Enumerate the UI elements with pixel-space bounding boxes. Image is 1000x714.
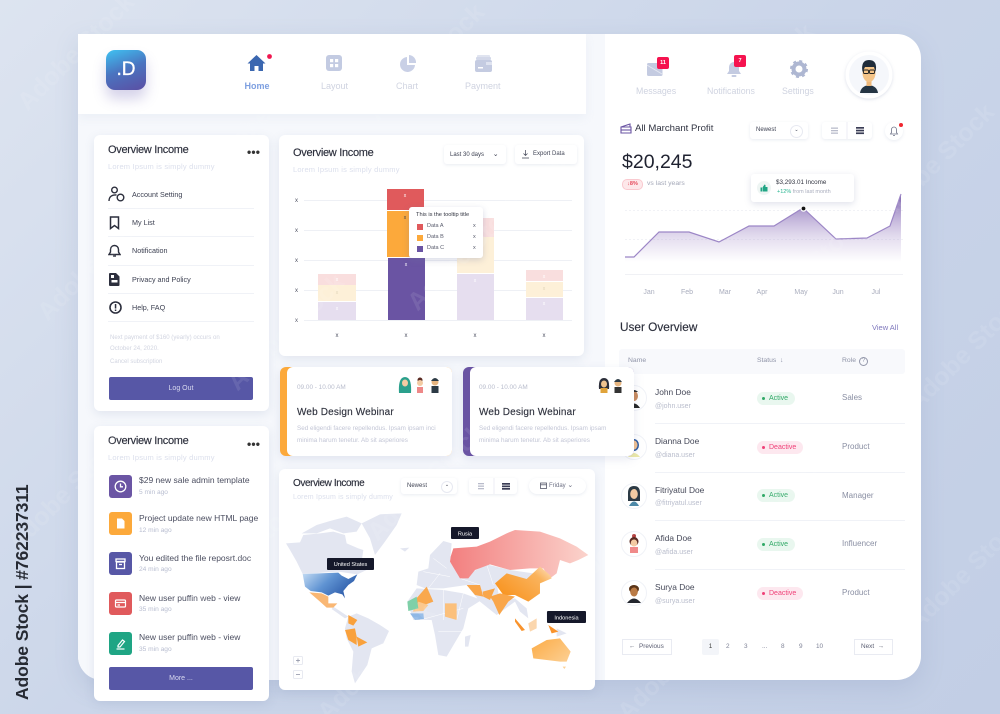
status: Dianna bbox=[757, 441, 803, 454]
panel: account menu bbox=[94, 135, 269, 411]
feed icon: file bbox=[109, 512, 132, 535]
stacked bar chart: x bbox=[543, 286, 546, 292]
watermark overlay: Adobe Stock bbox=[732, 418, 860, 546]
feed text 5: New user puffin web - view bbox=[139, 632, 240, 642]
nav: layout: Layout bbox=[321, 81, 348, 91]
pagination: previous bbox=[622, 639, 672, 655]
app logo bbox=[106, 50, 146, 90]
icon: thumbs up bbox=[757, 181, 771, 195]
description bbox=[297, 425, 436, 444]
country: Sudan bbox=[445, 603, 457, 620]
feed icon: archive bbox=[109, 552, 132, 575]
nav: chart bbox=[396, 55, 418, 91]
status: Afida bbox=[757, 538, 795, 551]
label: Indonesia bbox=[547, 611, 586, 623]
pagination: page numbers: 3 bbox=[744, 643, 748, 650]
time: 09.00 - 10.00 AM bbox=[297, 384, 346, 391]
dropdown: newest: ⌄ bbox=[794, 127, 799, 133]
area line chart: Jan bbox=[643, 289, 655, 296]
stacked bar chart: x bbox=[295, 288, 298, 294]
button: export data: Export Data bbox=[533, 151, 565, 157]
label: Indonesia: Indonesia bbox=[554, 616, 580, 622]
subtitle: bar chart: Lorem Ipsum is simply dummy bbox=[293, 165, 400, 174]
avatar: Surya bbox=[621, 580, 647, 606]
nav: home: Home bbox=[244, 81, 270, 91]
tooltip row: data A bbox=[417, 223, 476, 230]
menu: help: Help, FAQ bbox=[132, 303, 165, 312]
pagination: previous: ← Previous bbox=[629, 643, 664, 650]
nav: payment bbox=[465, 55, 501, 91]
feed text 4: New user puffin web - view bbox=[139, 593, 240, 603]
log out button bbox=[109, 377, 253, 400]
pagination: current page: 1 bbox=[709, 643, 712, 650]
income tooltip bbox=[751, 174, 854, 202]
role: Fitriyatul: Manager bbox=[842, 491, 874, 500]
stacked bar chart: x bbox=[336, 306, 339, 312]
nav: layout bbox=[321, 55, 348, 91]
stacked bar chart: x bbox=[474, 278, 477, 284]
role: Surya: Product bbox=[842, 588, 870, 597]
description: Sed eligendi facere repellendus. Ipsam ipsam inci bbox=[297, 425, 436, 432]
top icon notifications: 7 bbox=[738, 58, 742, 64]
pagination: page numbers: 2 bbox=[726, 643, 730, 650]
panel: world map bbox=[279, 469, 595, 690]
tooltip row: data B: Data B bbox=[427, 234, 444, 240]
stacked bar chart: x bbox=[404, 215, 407, 221]
watermark overlay: Adobe Stock bbox=[362, 418, 490, 546]
heading: all marchant profit: All Marchant Profit bbox=[635, 123, 713, 134]
label: United States: United States bbox=[334, 562, 367, 568]
role help icon: ? bbox=[862, 358, 865, 364]
subtitle: activity feed: Lorem Ipsum is simply dummy bbox=[108, 453, 215, 462]
change badge bbox=[622, 179, 643, 190]
nav: chart: Chart bbox=[396, 81, 418, 91]
dropdown: newest bbox=[750, 122, 808, 139]
stacked bar chart: x bbox=[404, 193, 407, 199]
grey landmasses: old world bbox=[407, 541, 567, 657]
watermark overlay: Adobe Stock bbox=[572, 248, 700, 376]
handle: John: @john.user bbox=[655, 403, 691, 410]
attendee avatars bbox=[598, 378, 622, 393]
stacked bar chart: x bbox=[543, 274, 546, 280]
dropdown: newest map bbox=[401, 478, 457, 494]
table header bbox=[619, 349, 905, 374]
feed icon: clock bbox=[109, 475, 132, 498]
dashboard shell bbox=[78, 34, 921, 680]
icon: profit wallet bbox=[620, 123, 632, 134]
more button bbox=[109, 667, 253, 690]
handle: Fitriyatul: @fitriyatul.user bbox=[655, 500, 702, 507]
pagination: current page bbox=[702, 639, 719, 655]
stacked bar chart: x bbox=[336, 277, 339, 283]
attendee avatars bbox=[398, 377, 439, 393]
activity more dots: ••• bbox=[247, 437, 260, 451]
handle: Surya: @surya.user bbox=[655, 598, 695, 605]
description: minima harum tenetur. Ab sit asperiores bbox=[479, 437, 590, 444]
subtitle: world map: Lorem Ipsum is simply dummy bbox=[293, 494, 393, 501]
stacked bar chart: x bbox=[295, 318, 298, 324]
menu: notification: Notification bbox=[132, 246, 168, 255]
heading: bar chart: Overview Income bbox=[293, 147, 373, 159]
area line chart bbox=[625, 194, 903, 296]
dropdown: newest map: Newest bbox=[407, 483, 427, 489]
user: Fitriyatul Doe: Fitriyatul Doe bbox=[655, 485, 704, 495]
day selector bbox=[529, 478, 586, 494]
card body bbox=[470, 367, 634, 456]
title: Web Design Webinar bbox=[479, 406, 576, 418]
status: Surya bbox=[757, 587, 803, 600]
description bbox=[479, 425, 606, 444]
feed icon: card bbox=[109, 592, 132, 615]
heading: activity feed: Overview Income bbox=[108, 435, 188, 447]
payment note: October 24, 2020. bbox=[110, 344, 159, 352]
eurasia africa oceania bbox=[407, 530, 588, 669]
countries: Colombia Peru Bolivia bbox=[345, 615, 367, 647]
label: United States bbox=[327, 558, 374, 570]
title: Web Design Webinar bbox=[297, 406, 394, 418]
pagination: page numbers bbox=[726, 643, 823, 650]
feed time 1: 5 min ago bbox=[139, 489, 168, 496]
country: West Africa green bbox=[407, 597, 418, 611]
description: minima harum tenetur. Ab sit asperiores bbox=[297, 437, 408, 444]
dropdown: last 30 days: Last 30 days ⌄ bbox=[450, 151, 499, 158]
more menu dots: ••• bbox=[247, 145, 260, 159]
chart tooltip bbox=[409, 207, 483, 258]
tooltip row: data C: x bbox=[473, 245, 476, 251]
handle: Dianna: @diana.user bbox=[655, 452, 695, 459]
tooltip row: data B: x bbox=[473, 234, 476, 240]
country: West Africa blue bbox=[410, 613, 424, 620]
dropdown: newest map: ⌄ bbox=[445, 482, 449, 488]
stacked bar chart: x bbox=[543, 301, 546, 307]
label: Rusia bbox=[451, 527, 479, 539]
feed text 3: You edited the file reposrt.doc bbox=[139, 553, 251, 563]
feed time 5: 35 min ago bbox=[139, 646, 172, 653]
country: Australia bbox=[532, 638, 571, 669]
country: Mexico bbox=[309, 592, 337, 608]
watermark overlay: Adobe Stock bbox=[872, 98, 1000, 226]
more button: More ... bbox=[169, 675, 193, 682]
column: name: Name bbox=[628, 357, 646, 364]
menu: privacy and policy: Privacy and Policy bbox=[132, 275, 191, 284]
status: Fitriyatul: Active bbox=[769, 492, 788, 499]
button: export data bbox=[515, 145, 577, 164]
right column: top icon messages: 11 bbox=[660, 60, 666, 66]
stacked bar chart: x bbox=[404, 333, 408, 339]
countries: Indonesia bbox=[515, 618, 558, 633]
cancel subscription link: Cancel subscription bbox=[110, 359, 162, 365]
watermark overlay: Adobe Stock bbox=[2, 428, 130, 556]
country: Mali bbox=[413, 602, 428, 612]
feed time 4: 35 min ago bbox=[139, 606, 172, 613]
webinar card: purple bbox=[463, 367, 634, 456]
top icon notifications bbox=[707, 55, 755, 96]
americas and west africa bbox=[286, 513, 409, 683]
watermark overlay: Adobe Stock bbox=[402, 188, 530, 316]
area line chart: Mar bbox=[719, 289, 732, 296]
header bar bbox=[78, 34, 586, 114]
day selector: Friday ⌄ bbox=[549, 482, 573, 489]
stacked bar chart: x bbox=[336, 290, 339, 296]
panel: stacked bar chart bbox=[279, 135, 584, 356]
stacked bar chart: x bbox=[295, 258, 298, 264]
right column: top icon messages: Messages bbox=[636, 86, 676, 96]
grey country borders bbox=[420, 558, 493, 632]
avatar: Afida bbox=[621, 531, 647, 557]
top icon settings: Settings bbox=[782, 86, 814, 96]
stacked bar chart: x bbox=[295, 228, 298, 234]
watermark overlay: Adobe Stock bbox=[32, 198, 160, 326]
heading: user overview: User Overview bbox=[620, 320, 697, 334]
country: China bbox=[495, 567, 552, 602]
stacked bar chart: x bbox=[474, 333, 476, 339]
profile avatar bbox=[844, 55, 894, 100]
column: role: Role bbox=[842, 357, 856, 364]
user: John Doe: John Doe bbox=[655, 387, 691, 397]
tooltip delta: +12% from last month bbox=[777, 189, 831, 195]
stacked bar chart: x bbox=[542, 333, 546, 339]
vs last years: vs last years bbox=[647, 180, 685, 187]
role: Dianna: Product bbox=[842, 442, 870, 451]
tooltip row: data A: x bbox=[473, 223, 476, 229]
icon: help bbox=[109, 301, 122, 314]
watermark overlay: Adobe Stock bbox=[182, 488, 310, 616]
dropdown: newest: Newest bbox=[756, 127, 776, 133]
watermark overlay: Adobe Stock bbox=[692, 18, 820, 146]
icon: document bbox=[109, 273, 120, 286]
card body bbox=[287, 367, 452, 456]
stacked bar chart: x bbox=[336, 333, 338, 339]
panel: activity feed bbox=[94, 426, 269, 701]
alert bell button bbox=[885, 122, 903, 140]
pagination: next: Next → bbox=[861, 643, 884, 650]
nav: home bbox=[244, 54, 272, 91]
country: USA bbox=[303, 573, 357, 598]
area line chart: Feb bbox=[681, 289, 693, 296]
payment note: Next payment of $160 (yearly) occurs on bbox=[110, 334, 220, 341]
menu: account setting: Account Setting bbox=[132, 190, 182, 199]
avatar: Dianna bbox=[625, 434, 647, 460]
icon: bell bbox=[108, 244, 121, 257]
status: Surya: Deactive bbox=[769, 590, 796, 597]
column: status: Status ↓ bbox=[757, 357, 783, 364]
avatar: Fitriyatul bbox=[621, 483, 647, 509]
tooltip row: data C bbox=[417, 245, 476, 252]
zoom controls bbox=[294, 656, 302, 678]
watermark overlay: Adobe Stock bbox=[742, 208, 870, 336]
menu: my list: My List bbox=[132, 218, 155, 227]
right column: top icon messages bbox=[636, 57, 676, 96]
role: John: Sales bbox=[842, 393, 862, 402]
countries: South Asia and Middle East bbox=[467, 585, 515, 615]
change badge: ↓8% bbox=[627, 181, 638, 187]
user: Dianna Doe: Dianna Doe bbox=[655, 436, 699, 446]
tooltip row: data A: Data A bbox=[427, 223, 444, 229]
tooltip row: data C: Data C bbox=[427, 245, 444, 251]
pagination: page numbers: 8 bbox=[781, 643, 785, 650]
country: Russia bbox=[450, 530, 588, 578]
country: Borneo bbox=[528, 618, 537, 632]
dropdown: last 30 days bbox=[444, 145, 506, 164]
watermark overlay: Adobe Stock bbox=[542, 488, 670, 616]
watermark overlay: Adobe Stock bbox=[362, 0, 490, 126]
big profit value: $20,245 bbox=[622, 151, 692, 173]
user: Afida Doe: Afida Doe bbox=[655, 533, 692, 543]
feed time 3: 24 min ago bbox=[139, 566, 172, 573]
map view toggle bbox=[469, 478, 517, 494]
pagination: page numbers: 10 bbox=[816, 643, 823, 650]
feed time 2: 12 min ago bbox=[139, 527, 172, 534]
feed icon: pencil bbox=[109, 632, 132, 655]
feed text 2: Project update new HTML page bbox=[139, 513, 258, 523]
watermark overlay: Adobe Stock bbox=[512, 78, 640, 206]
heading: account menu: Overview Income bbox=[108, 144, 188, 156]
status: Fitriyatul bbox=[757, 489, 795, 502]
status: John bbox=[757, 392, 795, 405]
subtitle: account menu: Lorem Ipsum is simply dummy bbox=[108, 162, 215, 171]
stacked bar chart: x bbox=[405, 262, 408, 268]
label: Rusia: Rusia bbox=[458, 532, 473, 538]
description: Sed eligendi facere repellendus. Ipsam ipsam bbox=[479, 425, 606, 432]
heading: world map: Overview Income bbox=[293, 478, 364, 489]
log out button: Log Out bbox=[169, 385, 193, 392]
top icon notifications: Notifications bbox=[707, 86, 755, 96]
area line chart: Apr bbox=[757, 289, 768, 296]
feed text 1: $29 new sale admin template bbox=[139, 475, 250, 485]
tooltip amount: $3,293.01 Income bbox=[776, 179, 826, 186]
area line chart: Jun bbox=[832, 289, 844, 296]
tooltip title: This is the tooltip title bbox=[416, 212, 469, 218]
view toggle bbox=[822, 122, 872, 139]
stacked bar chart bbox=[295, 189, 572, 339]
status: Dianna: Deactive bbox=[769, 444, 796, 451]
pagination: page numbers: ... bbox=[762, 643, 767, 650]
status: Afida: Active bbox=[769, 541, 788, 548]
role help icon bbox=[859, 357, 868, 366]
webinar card: orange bbox=[280, 367, 452, 456]
world map bbox=[286, 514, 588, 683]
icon: bookmark bbox=[110, 216, 120, 230]
handle: Afida: @afida.user bbox=[655, 549, 693, 556]
country: Algeria and Mali bbox=[415, 587, 433, 607]
stacked bar chart: x bbox=[295, 198, 298, 204]
pagination: page numbers: 9 bbox=[799, 643, 803, 650]
user: Surya Doe: Surya Doe bbox=[655, 582, 695, 592]
payment note bbox=[110, 334, 220, 352]
pagination: next bbox=[854, 639, 893, 655]
left workspace background bbox=[78, 34, 605, 680]
status: John: Active bbox=[769, 395, 788, 402]
nav: payment: Payment bbox=[465, 81, 501, 91]
watermark overlay: Adobe Stock bbox=[202, 48, 330, 176]
view all link: View All bbox=[872, 322, 898, 332]
area line chart: May bbox=[794, 289, 808, 296]
icon: account setting bbox=[108, 186, 124, 202]
vertical stock credit: Adobe Stock | #762237311 bbox=[12, 484, 32, 700]
tooltip row: data B bbox=[417, 234, 476, 241]
area line chart: Jul bbox=[872, 289, 881, 296]
time: 09.00 - 10.00 AM bbox=[479, 384, 528, 391]
app logo: .D bbox=[116, 59, 136, 80]
role: Afida: Influencer bbox=[842, 539, 877, 548]
top icon settings bbox=[782, 60, 814, 96]
avatar: John bbox=[634, 385, 647, 411]
grey landmasses: americas bbox=[286, 513, 409, 683]
watermark overlay: Adobe Stock bbox=[222, 268, 350, 396]
